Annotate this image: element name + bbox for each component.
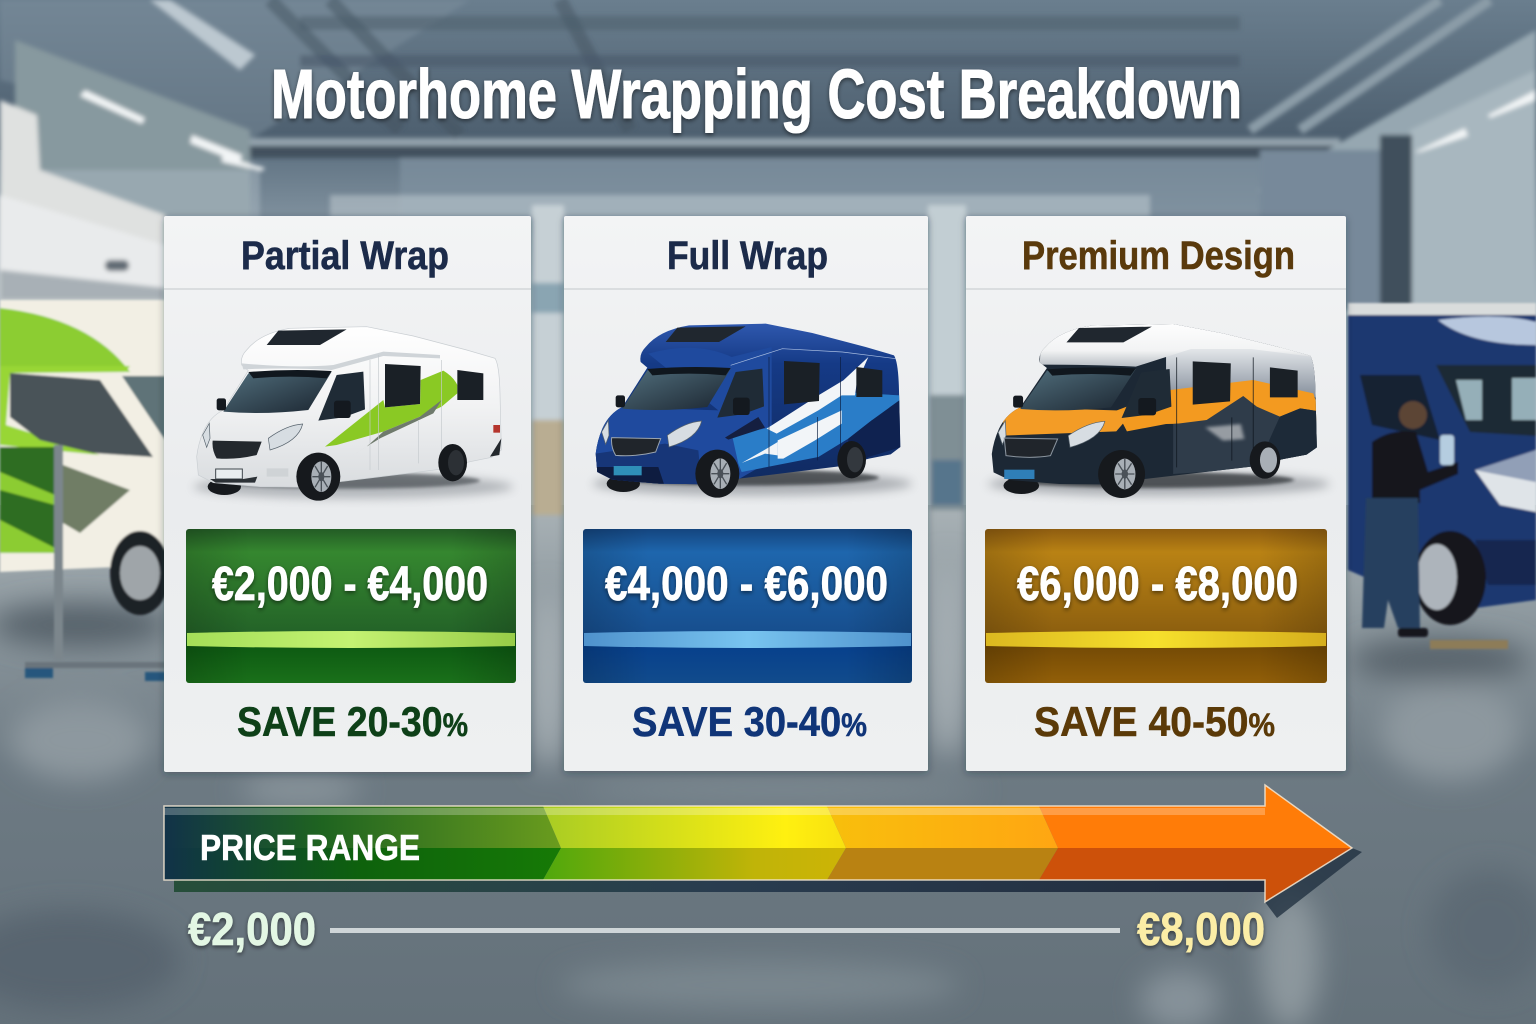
panel: full wrap (564, 216, 928, 771)
savings: 40-50%: SAVE 40-50% (1034, 698, 1275, 745)
price box: 6000 to 8000: €6,000 - €8,000 (1017, 558, 1298, 611)
heading: premium design: Premium Design (1022, 234, 1295, 278)
arrow label: PRICE RANGE (200, 827, 420, 868)
title: Motorhome Wrapping Cost Breakdown (271, 55, 1242, 133)
background: white van top left (0, 195, 165, 300)
panel: premium design (966, 216, 1346, 771)
background: blue motorhome and worker right (1348, 303, 1536, 649)
range scale line (330, 928, 1120, 933)
motorhome: blue wrap with white swoosh (592, 324, 912, 498)
range minimum label: €2,000 (188, 903, 316, 955)
price box: 6000 to 8000 (985, 529, 1327, 683)
price box: 4000 to 6000: €4,000 - €6,000 (605, 558, 888, 611)
background: green motorhome left (0, 300, 170, 681)
price box: 2000 to 4000 (186, 529, 516, 683)
savings: 30-40%: SAVE 30-40% (632, 698, 867, 745)
price box: 4000 to 6000 (583, 529, 912, 683)
heading: partial wrap: Partial Wrap (241, 234, 449, 278)
price box: 2000 to 4000: €2,000 - €4,000 (212, 558, 488, 611)
motorhome: white with green stripe (193, 327, 513, 501)
panel: partial wrap (164, 216, 531, 772)
range maximum label: €8,000 (1137, 903, 1265, 955)
arrow: price range gradient (164, 785, 1362, 918)
motorhome: mountain sunset wrap (988, 321, 1330, 498)
savings: 20-30%: SAVE 20-30% (237, 698, 468, 745)
heading: full wrap: Full Wrap (667, 234, 828, 278)
